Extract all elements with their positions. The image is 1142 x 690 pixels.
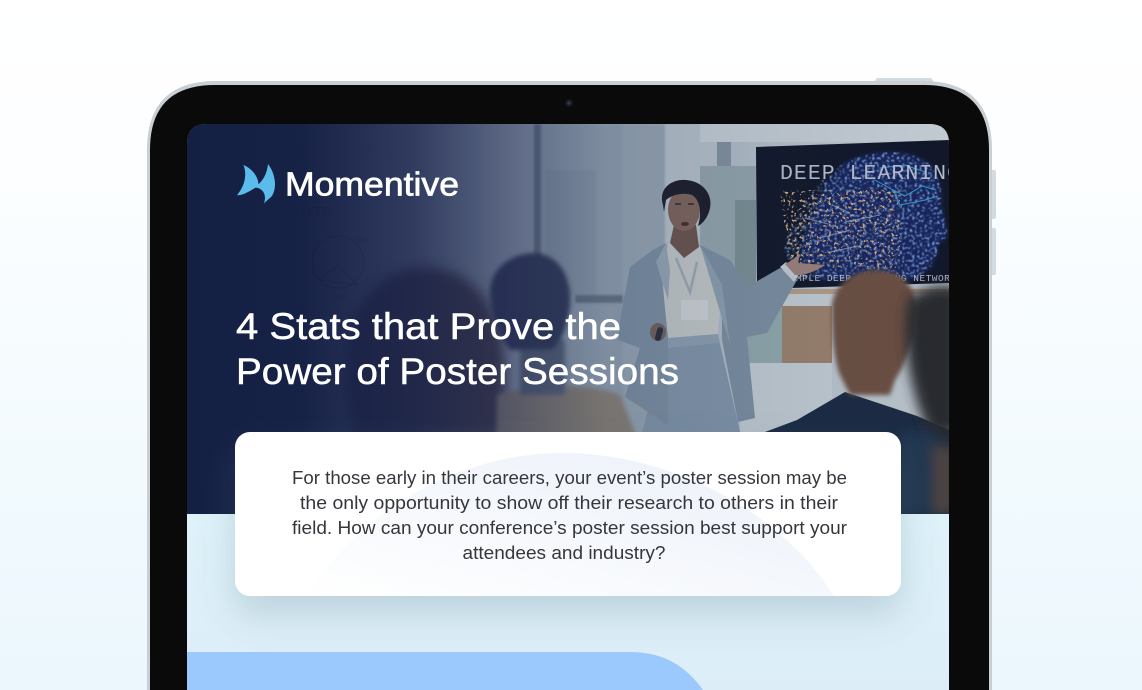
brain network lines — [875, 165, 938, 205]
background room — [534, 124, 950, 434]
title — [236, 312, 678, 384]
faint chart sketch: 55% — [355, 238, 369, 245]
audience, man at right — [765, 270, 950, 514]
title: Power of Poster Sessions — [236, 350, 679, 392]
tablet frame — [147, 81, 992, 690]
logo mark — [237, 164, 275, 204]
screen content — [187, 124, 960, 690]
brand logo — [237, 164, 459, 204]
presentation monitor — [756, 140, 960, 289]
intro text — [292, 467, 847, 563]
lanyard — [676, 258, 697, 292]
pointing hand — [785, 254, 825, 275]
monitor heading: DEEP LEARNING — [780, 162, 960, 186]
shirt — [663, 243, 722, 338]
intro card — [235, 432, 901, 596]
navy gradient overlay — [187, 124, 949, 514]
trousers — [642, 334, 740, 432]
card background arc — [393, 453, 834, 596]
lower light-blue section — [187, 514, 949, 690]
brain graphic — [780, 152, 948, 280]
hair — [662, 180, 711, 226]
intro text: field. How can your conference’s poster session best support your — [292, 517, 847, 538]
faint chart sketch: /YTD — [302, 204, 332, 219]
intro text: the only opportunity to show off their research to others in their — [300, 492, 838, 513]
audience, blurred person at far right — [905, 286, 960, 435]
logo wordmark: Momentive — [285, 166, 459, 202]
intro text: For those early in their careers, your event’s poster session may be — [292, 467, 847, 488]
audience, blurred middle person — [488, 250, 637, 432]
hand and clicker — [650, 323, 666, 341]
intro text: attendees and industry? — [462, 542, 666, 563]
presenter — [618, 180, 825, 440]
audience, blurred woman head — [346, 267, 506, 440]
blue section panel — [187, 652, 703, 690]
camera — [565, 99, 573, 107]
faint chart sketch — [290, 152, 390, 312]
faint chart sketch: 25% — [333, 295, 347, 302]
tablet device — [147, 78, 996, 690]
neck and face — [670, 225, 699, 258]
hero photo — [187, 124, 960, 515]
sleeve cuff — [780, 262, 798, 282]
data streaks — [805, 205, 880, 252]
badge — [681, 300, 708, 320]
tablet side buttons — [875, 78, 996, 275]
title: 4 Stats that Prove the — [236, 305, 621, 347]
audience lower right tones — [902, 430, 949, 514]
blazer — [618, 243, 668, 425]
monitor caption: MPLE DEEP LEARNING NETWORK — [796, 273, 956, 284]
